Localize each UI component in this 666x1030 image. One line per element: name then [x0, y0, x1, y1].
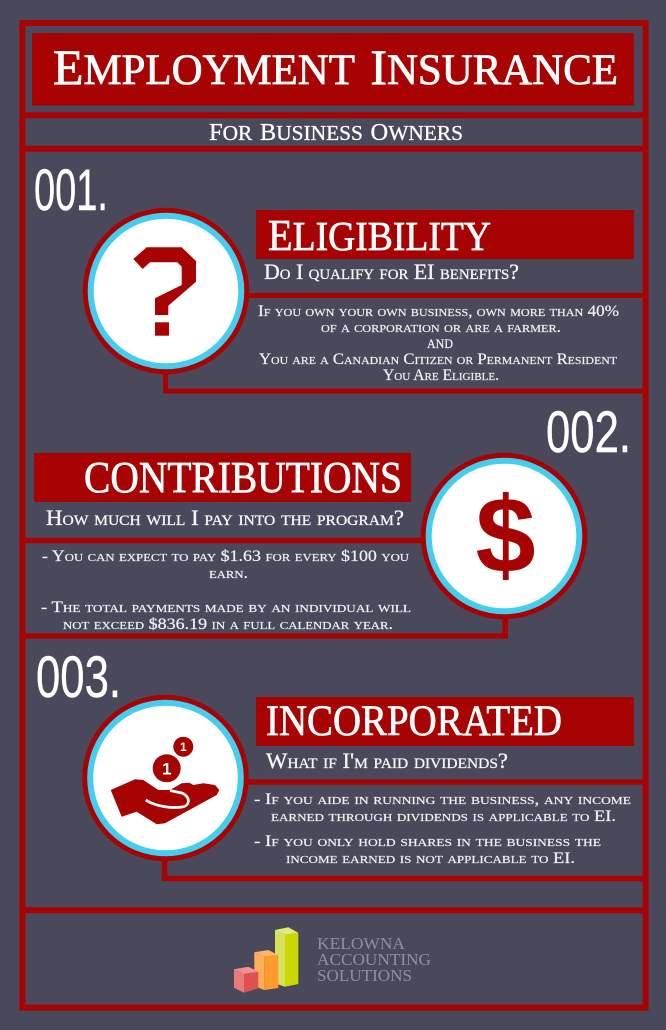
- text block: eligibility criteria: [258, 303, 619, 384]
- text block: contribution details: - You can expect to pay $1.63 for every $100 you: [42, 548, 409, 565]
- panel: eligibility: [86, 198, 646, 391]
- icon: hand with coins in circle: [85, 698, 246, 858]
- logo: kelowna accounting solutions: [234, 927, 431, 993]
- connector lines: contributions: [22, 540, 505, 636]
- text block: eligibility criteria: of a corporation or are a farmer.: [321, 319, 561, 336]
- text block: dividends details: - If you only hold shares in the business the: [254, 833, 601, 850]
- text block: contribution details: earn.: [209, 565, 248, 582]
- text block: contribution details: - The total payments made by an individual will: [41, 599, 411, 616]
- section number 002: 002.: [546, 400, 631, 465]
- section number 003: 003.: [36, 645, 121, 710]
- text block: dividends details: income earned is not applicable to EI.: [286, 850, 575, 867]
- logo wordmark: KELOWNA: [317, 934, 406, 953]
- text block: dividends details: [254, 791, 631, 867]
- heading: eligibility: [256, 198, 634, 263]
- text block: eligibility criteria: You Are Eligible.: [383, 367, 499, 384]
- icon: dollar sign in circle: [424, 456, 584, 616]
- text block: dividends details: earned through dividends is applicable to EI.: [271, 808, 616, 825]
- heading: eligibility: Eligibility: [268, 198, 491, 263]
- icon: logo bars: [234, 927, 298, 993]
- heading: contributions: CONTRIBUTIONS: [84, 453, 402, 502]
- icon: dollar sign in circle: $: [475, 474, 536, 595]
- title: Employment Insurance: [53, 30, 618, 98]
- text block: dividends details: - If you aide in running the business, any income: [254, 791, 631, 808]
- question: eligibility: Do I qualify for EI benefits?: [264, 259, 519, 284]
- section number 001: 001.: [34, 158, 108, 223]
- logo wordmark: [317, 934, 431, 985]
- logo wordmark: ACCOUNTING: [317, 950, 431, 969]
- icon: question mark in circle: [86, 210, 246, 372]
- question: incorporated: What if I'm paid dividends?: [266, 748, 508, 773]
- heading: incorporated: INCORPORATED: [266, 698, 562, 745]
- text block: contribution details: not exceed $836.19 in a full calendar year.: [63, 616, 393, 633]
- subtitle: For Business Owners: [209, 114, 463, 147]
- connector lines: incorporated: [164, 782, 646, 878]
- text block: contribution details: [41, 548, 411, 633]
- text block: eligibility criteria: You are a Canadian Citizen or Permanent Resident: [259, 351, 617, 368]
- panel: contributions: [22, 453, 584, 636]
- icon: hand with coins in circle: 1: [180, 740, 187, 754]
- connector lines: eligibility: [166, 296, 646, 391]
- text block: eligibility criteria: If you own your own business, own more than 40%: [258, 303, 619, 320]
- question: contributions: How much will I pay into the program?: [46, 505, 404, 530]
- panel: incorporated: [85, 697, 646, 878]
- logo wordmark: SOLUTIONS: [317, 966, 412, 985]
- icon: hand with coins in circle: 1: [162, 760, 171, 778]
- text block: eligibility criteria: AND: [427, 336, 453, 351]
